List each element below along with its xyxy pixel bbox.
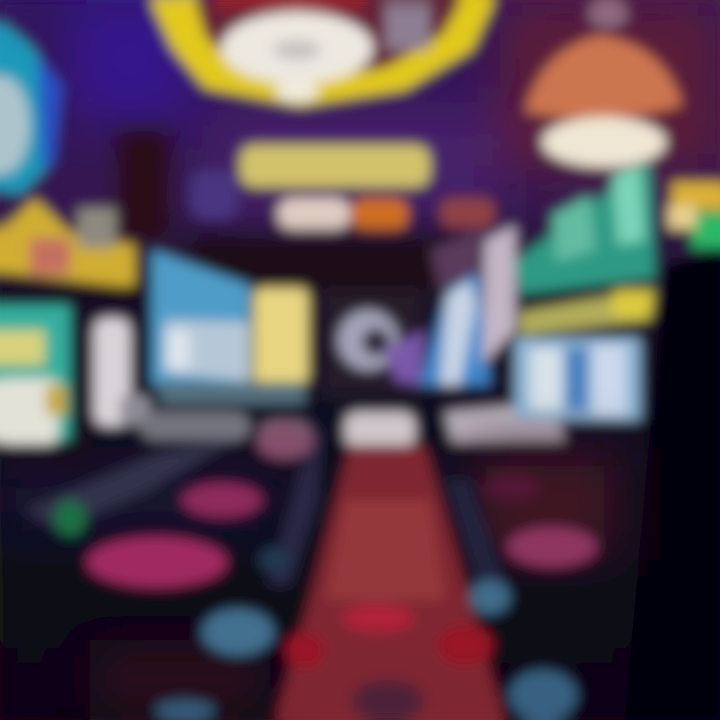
central yellow sign [190,145,495,230]
left slot machine screen [0,305,150,444]
right slot screens [515,288,655,420]
green neon machines [514,160,655,294]
left top cyan screen [0,20,62,195]
left yellow sign [0,198,140,302]
centre grey machine [338,310,415,448]
centre-left slot screens [140,250,312,454]
blue floor stools [155,547,577,720]
right edge neon [668,182,720,248]
right dark wall [625,248,720,720]
dark central band [60,130,460,465]
ceiling medallion: yellow ring [150,0,495,106]
pink stools [87,425,597,587]
rainbow machines [385,225,565,442]
left lower aisle machines [25,420,505,585]
floor shadows [90,450,620,720]
right hanging lamp [525,0,682,167]
ceiling glow [0,0,720,530]
red carpet [275,445,505,720]
